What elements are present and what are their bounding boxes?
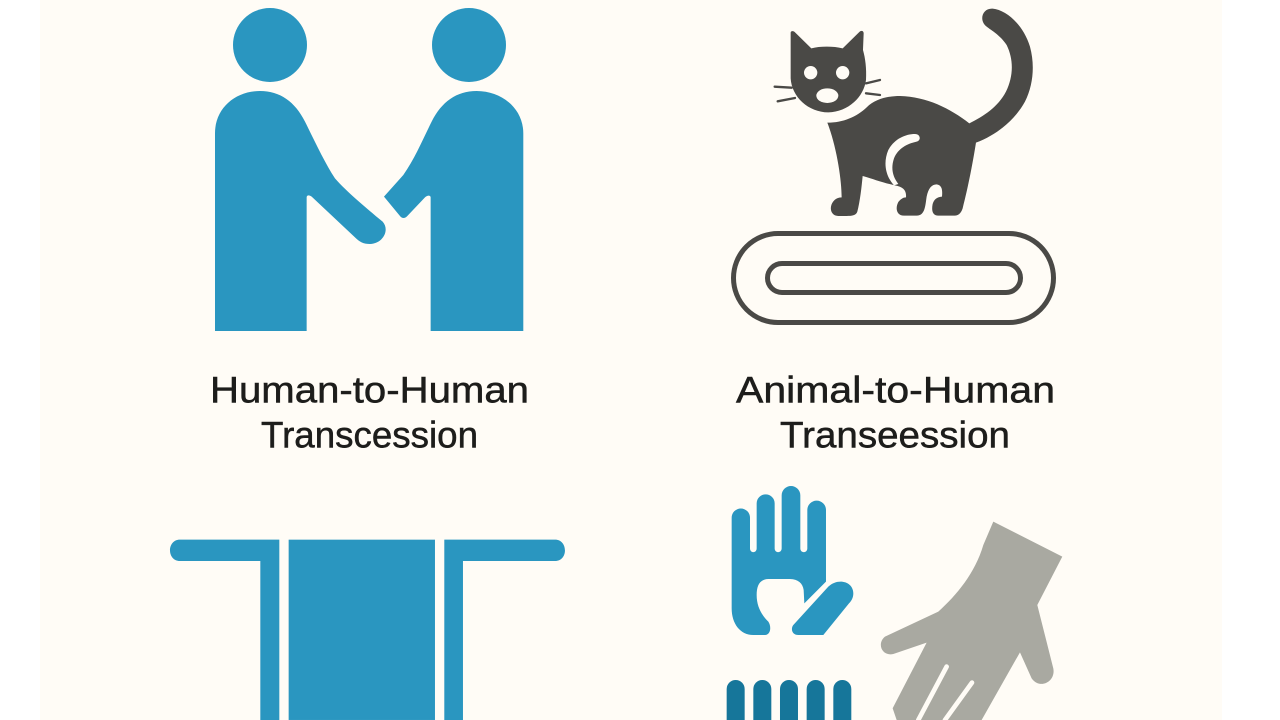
- label: human to human: Human-to-Human: [210, 370, 529, 410]
- icon: two people shaking hands: [215, 8, 523, 331]
- grey hand: [881, 522, 1062, 720]
- label: animal to human: Animal-to-Human: [736, 370, 1055, 410]
- cushion: [734, 234, 1054, 322]
- icon: hands: [727, 486, 1062, 720]
- icon: blue table shape: [170, 540, 565, 720]
- label: animal to human: [736, 370, 1055, 456]
- icon: cat on a cushion: [734, 9, 1054, 322]
- label: animal to human: Transeession: [780, 414, 1010, 456]
- teal fingers: [727, 680, 851, 720]
- label: human to human: Transcession: [261, 414, 478, 456]
- cat markings: [804, 66, 920, 185]
- label: human to human: [210, 370, 529, 456]
- grey hand finger gaps: [918, 667, 972, 720]
- blue raised hand: [732, 486, 826, 635]
- cat: [775, 9, 1033, 216]
- whiskers: [775, 80, 880, 101]
